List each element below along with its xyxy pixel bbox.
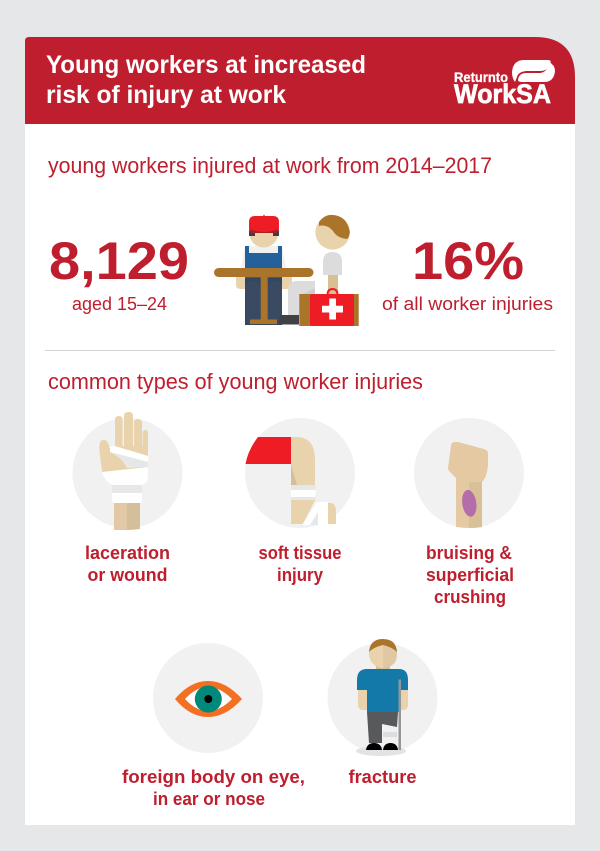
logo: Return to WorkSA: WorkSA — [454, 79, 551, 109]
logo: Return to WorkSA — [454, 60, 555, 109]
label: soft tissue — [258, 543, 342, 563]
label: laceration — [85, 543, 170, 563]
heading: injured 2014–2017: young workers injured at work from 2014–2017 — [48, 153, 492, 178]
label: in ear or nose — [153, 789, 265, 809]
label: foreign body on eye, — [122, 767, 305, 787]
injured worker — [278, 215, 350, 324]
label: injury — [277, 565, 323, 585]
stat: 8,129 — [49, 232, 189, 314]
stat: 16% — [382, 232, 553, 314]
title: risk of injury at work — [46, 81, 286, 109]
label — [122, 767, 305, 809]
icon: eye — [175, 681, 242, 717]
title: Young workers at increased — [46, 51, 366, 79]
panel: header band — [25, 37, 575, 124]
item: laceration or wound — [72, 412, 182, 585]
label: superficial — [426, 565, 514, 585]
icon: bandaged hand — [99, 412, 148, 530]
seated worker — [236, 214, 292, 325]
item: bruising and superficial crushing — [414, 418, 524, 607]
title — [46, 51, 366, 109]
stat: 8,129: aged 15–24 — [72, 293, 167, 314]
icon: bruised arm — [448, 442, 488, 528]
icon: bandaged arm — [246, 437, 336, 525]
item: soft tissue injury — [245, 418, 355, 585]
stat: 16%: of all worker injuries — [382, 293, 553, 314]
label: fracture — [348, 767, 416, 787]
label — [85, 543, 170, 585]
item: foreign body — [122, 643, 305, 809]
label: bruising & — [426, 543, 512, 563]
logo: Return to WorkSA: Returnto — [454, 70, 508, 85]
label — [426, 543, 514, 607]
first aid kit — [299, 289, 359, 326]
label: or wound — [88, 565, 168, 585]
icon: person on crutch — [356, 639, 408, 756]
heading: common types: common types of young worker injuries — [48, 369, 423, 394]
label — [258, 543, 342, 585]
stat: 16%: 16% — [412, 232, 524, 291]
label: crushing — [434, 587, 506, 607]
item: fracture — [328, 639, 438, 787]
table — [214, 268, 314, 324]
stat: 8,129: 8,129 — [49, 232, 189, 291]
illustration: workers and first aid kit — [214, 214, 359, 326]
